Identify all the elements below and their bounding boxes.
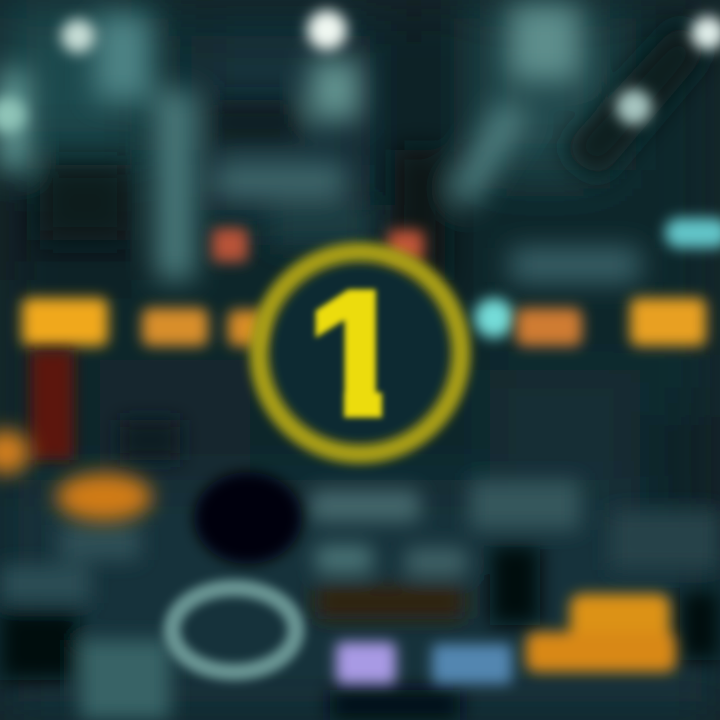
lower machinery shapes <box>0 420 720 720</box>
upper background structures <box>0 5 710 282</box>
row of orange labels right <box>516 298 706 346</box>
small red-orange lights above the row <box>212 228 424 262</box>
orange mound left <box>0 430 152 521</box>
pale teal ring <box>172 588 296 672</box>
badge inner disc <box>268 261 452 445</box>
badge ring <box>259 252 461 454</box>
dark red column <box>30 350 74 460</box>
gold stacked blocks <box>526 594 676 672</box>
yellow ring badge <box>259 252 461 454</box>
row of orange labels left <box>22 298 264 346</box>
glowing lights <box>0 10 720 338</box>
purple and blue tiles <box>336 642 512 684</box>
black cup shape <box>194 472 302 564</box>
numeral one: 1 <box>307 256 405 452</box>
